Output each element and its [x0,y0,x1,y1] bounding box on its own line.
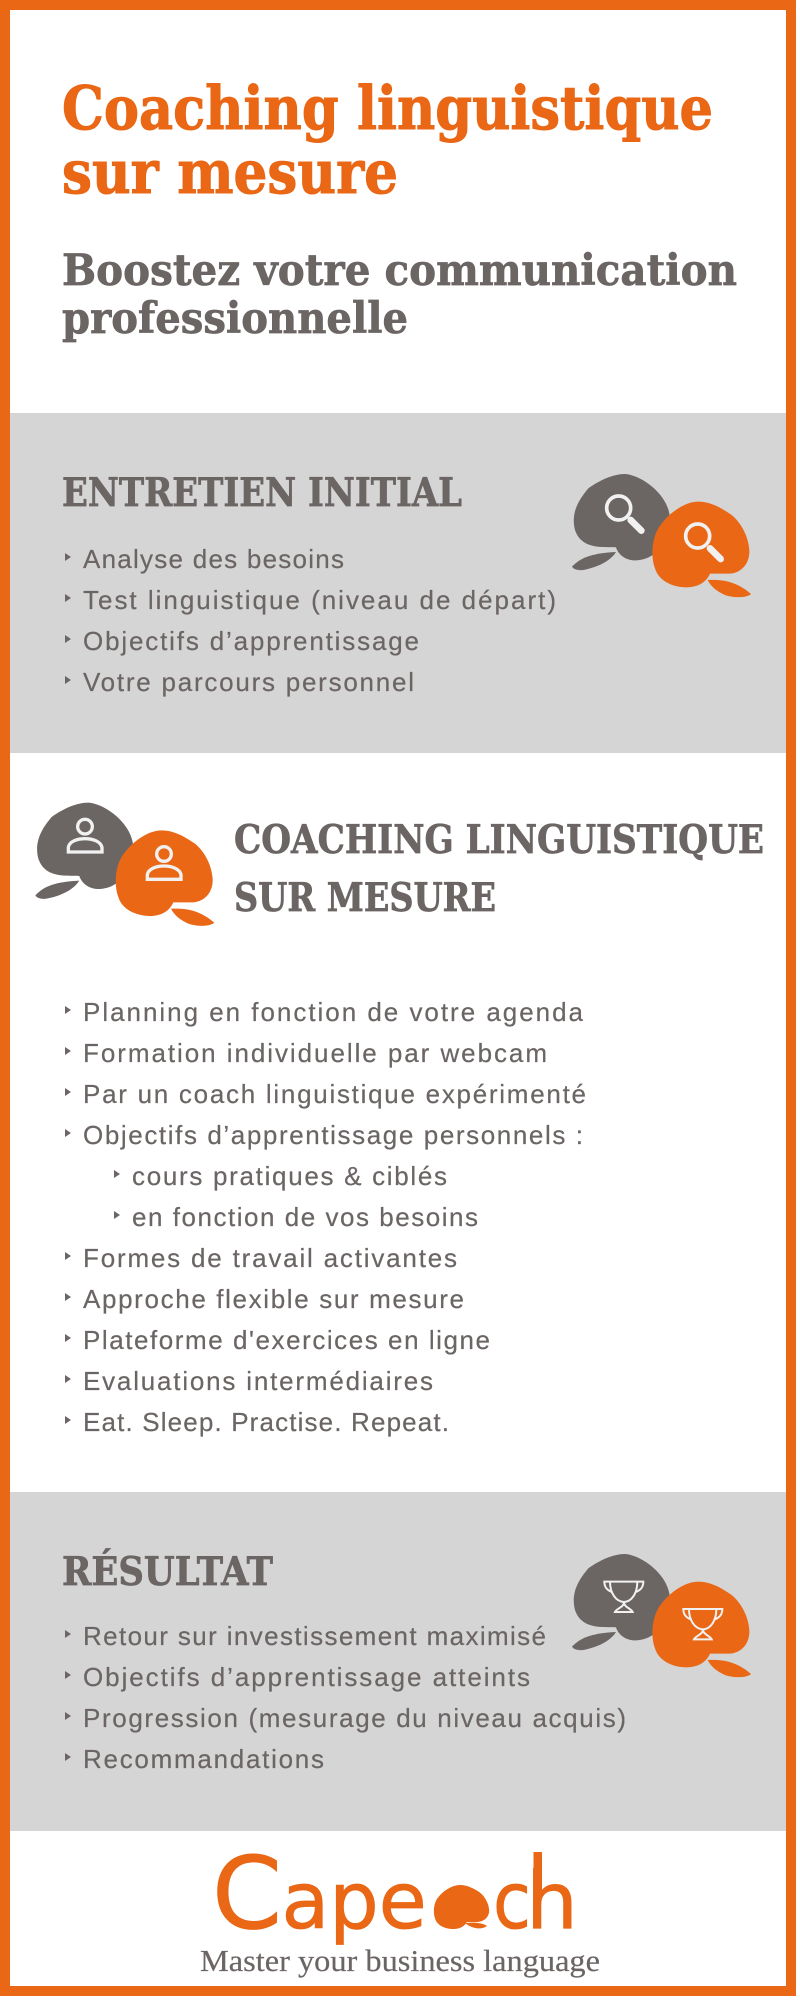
panel: entretien initial background [10,413,791,753]
list: coaching details: Eat. Sleep. Practise. Repeat. [83,1407,449,1437]
icon: trophy speech blobs [572,1554,751,1677]
logo: Capeach: ape [282,1857,427,1947]
list: entretien initial: Analyse des besoins [83,544,344,574]
section: résultat [62,1548,751,1774]
logo mark: speech blob [434,1885,489,1929]
heading: résultat: RÉSULTAT [62,1548,273,1595]
list: coaching details: Planning en fonction de votre agenda [83,997,584,1027]
logo: Capeach: C [212,1835,282,1952]
list: coaching details: Evaluations intermédiaires [83,1366,433,1396]
heading: entretien initial: ENTRETIEN INITIAL [62,470,462,516]
section: coaching linguistique sur mesure [35,803,764,1437]
list: entretien initial: Objectifs d’apprentissage [83,626,419,656]
icon: person speech blobs [35,803,214,926]
tagline: Master your business language [200,1943,600,1978]
heading: coaching linguistique sur mesure [234,817,764,921]
logo: Capeach [200,1835,600,1978]
list: coaching details: Plateforme d'exercices en ligne [83,1325,490,1355]
list: résultat [65,1621,626,1774]
list: coaching details: Approche flexible sur mesure [83,1284,464,1314]
list: résultat: Progression (mesurage du niveau acquis) [83,1703,626,1733]
subtitle [62,246,737,344]
title: Coaching linguistique [62,74,713,144]
icon: magnifying glass speech blobs [572,474,751,597]
list: coaching details: cours pratiques & ciblés [132,1161,447,1191]
section: entretien initial [62,470,751,697]
list: coaching details: Formes de travail activantes [83,1243,457,1273]
list: entretien initial [65,544,556,697]
list: coaching details: Formation individuelle par webcam [83,1038,547,1068]
subtitle: Boostez votre communication [62,246,737,296]
panel: résultat background [10,1492,791,1831]
list: coaching details [65,997,586,1437]
logo: Capeach: c [493,1857,531,1947]
subtitle: professionnelle [62,294,408,344]
list: résultat: Retour sur investissement maximisé [83,1621,546,1651]
list: résultat: Objectifs d’apprentissage atteints [83,1662,530,1692]
list: coaching details: Objectifs d’apprentissage personnels : [83,1120,583,1150]
list: entretien initial: Votre parcours personnel [83,667,414,697]
title: sur mesure [62,138,398,208]
logo: Capeach: h [526,1857,578,1947]
list: coaching details: en fonction de vos besoins [132,1202,478,1232]
title [62,74,713,208]
list: coaching details: Par un coach linguistique expérimenté [83,1079,586,1109]
list: entretien initial: Test linguistique (niveau de départ) [83,585,556,615]
list: résultat: Recommandations [83,1744,324,1774]
heading: coaching linguistique sur mesure: SUR MESURE [234,875,496,921]
